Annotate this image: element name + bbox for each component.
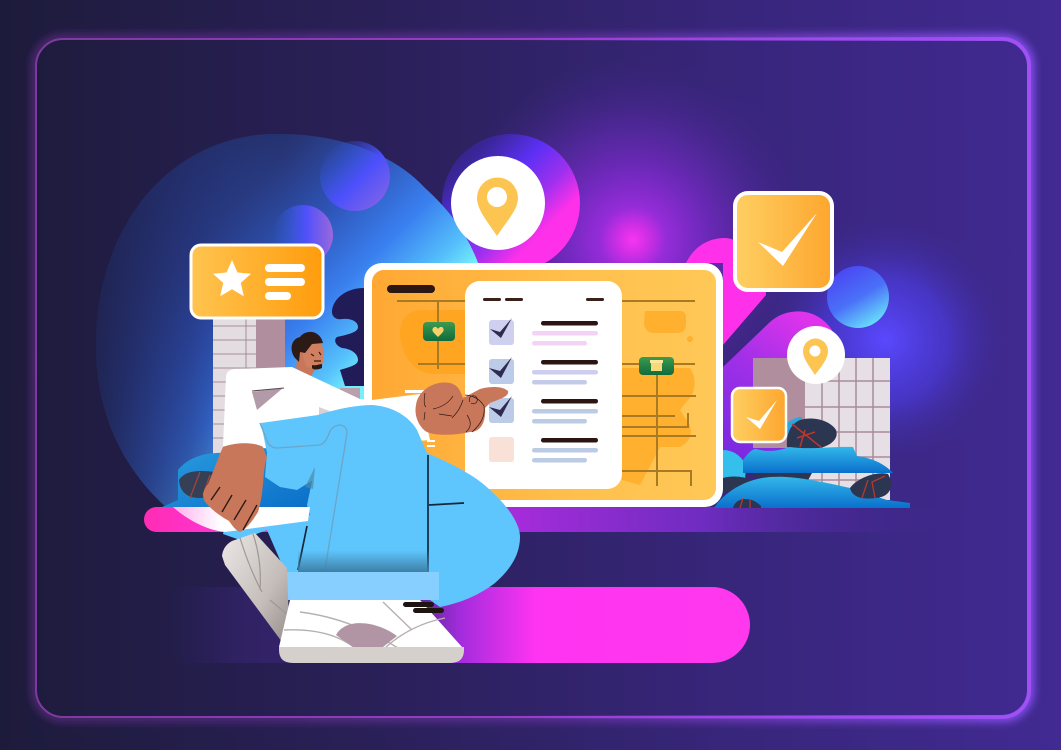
map card title (387, 285, 435, 293)
mauve ledge behind shirt (340, 388, 360, 399)
blob circle lower (273, 205, 333, 265)
blob circle upper (320, 141, 390, 211)
star card (191, 245, 323, 318)
beard (312, 364, 322, 370)
trouser shadow fold (305, 467, 315, 489)
man (173, 332, 520, 663)
pointing hand (415, 382, 508, 435)
checklist row 2 (489, 357, 598, 384)
purple glow (448, 55, 818, 425)
left building (213, 319, 285, 454)
magenta blob (686, 238, 766, 345)
white map labels (405, 390, 435, 447)
trouser seams (260, 423, 464, 571)
front shoe (279, 600, 464, 663)
trouser shading (298, 550, 429, 572)
navy plant with wavy edge (332, 288, 364, 386)
left plant (162, 440, 320, 507)
trousers (223, 405, 520, 607)
checklist row 3 (489, 396, 598, 424)
neck and face (292, 332, 324, 378)
green marker box (639, 357, 674, 375)
large check card (735, 193, 832, 290)
checklist row 4 (489, 437, 598, 462)
top bar (144, 507, 944, 532)
map card (364, 263, 723, 507)
checklist row 1 (489, 318, 598, 346)
back shoe (222, 533, 290, 648)
map area right (622, 311, 695, 485)
hair (292, 332, 323, 362)
small check card (732, 388, 786, 442)
blue glow (760, 215, 1010, 465)
right building (753, 358, 890, 503)
bottom bar (170, 587, 750, 663)
cuff (283, 572, 439, 600)
right pin badge (787, 326, 845, 384)
right plants (714, 417, 910, 508)
map area left (400, 310, 470, 374)
purple blob (723, 311, 832, 470)
blue circle right (827, 266, 889, 328)
white table edge (173, 507, 310, 532)
shirt (223, 367, 430, 450)
large blue blob (96, 134, 485, 506)
checklist header (483, 298, 604, 301)
checklist panel (465, 281, 622, 489)
left hand (203, 443, 267, 532)
magenta circle (442, 134, 580, 272)
green marker heart (423, 322, 455, 341)
map roads (397, 301, 696, 486)
location pin badge top (451, 156, 545, 250)
